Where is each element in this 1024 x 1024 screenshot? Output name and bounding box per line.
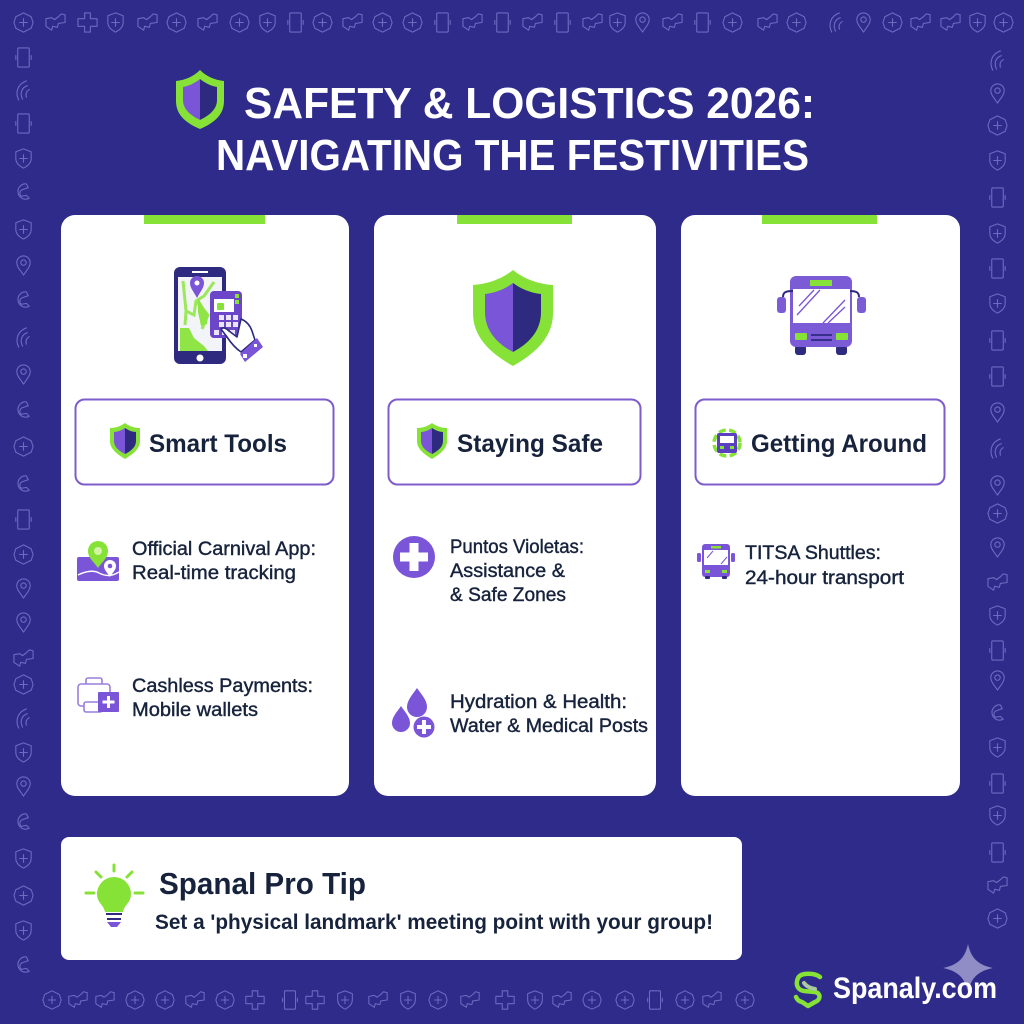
icon: s shield <box>796 974 820 1006</box>
icon: water drops <box>392 688 434 738</box>
label box <box>388 400 640 484</box>
panel: getting around <box>681 215 960 796</box>
icon: small shield <box>110 423 140 459</box>
heading: Getting Around <box>751 430 927 458</box>
text: cashless payments <box>132 676 313 721</box>
icon: phone with payment terminal <box>174 267 263 364</box>
text: official carnival app: Real-time tracking <box>132 563 296 584</box>
heading: Spanal Pro Tip <box>159 866 366 901</box>
text: hydration and health: Hydration & Health: <box>450 692 627 713</box>
text: hydration and health <box>450 692 648 737</box>
wordmark: Spanaly.com <box>833 972 997 1005</box>
panel: staying safe <box>374 215 656 796</box>
icon: small shield <box>417 423 447 459</box>
decorative icon border: right column <box>988 51 1007 928</box>
icon: small bus <box>697 544 735 579</box>
icon: map with pins <box>77 541 119 581</box>
label box <box>696 400 944 484</box>
text: puntos violetas: Puntos Violetas: <box>450 537 584 558</box>
icon: medical cross circle <box>393 536 435 578</box>
icon: title shield <box>176 70 224 129</box>
heading: Smart Tools <box>149 430 287 458</box>
icon: large shield <box>473 270 553 366</box>
text: titsa shuttles: 24-hour transport <box>745 568 905 589</box>
text: cashless payments: Cashless Payments: <box>132 676 313 697</box>
text: puntos violetas: & Safe Zones <box>450 585 566 606</box>
icon: large bus <box>777 276 866 355</box>
text: titsa shuttles: TITSA Shuttles: <box>745 543 881 564</box>
text: titsa shuttles <box>745 543 905 589</box>
panel: pro tip <box>61 837 742 960</box>
text: tip: Set a 'physical landmark' meeting point with your group! <box>155 911 713 934</box>
icon: wallet cards <box>78 678 119 712</box>
title <box>176 70 815 180</box>
title line 1: SAFETY & LOGISTICS 2026: <box>244 79 815 128</box>
icon: small bus in green ring <box>714 430 740 456</box>
text: official carnival app: Official Carnival App: <box>132 539 316 560</box>
title line 2: NAVIGATING THE FESTIVITIES <box>216 131 809 180</box>
text: hydration and health: Water & Medical Posts <box>450 716 648 737</box>
text: puntos violetas <box>450 537 584 606</box>
text: official carnival app <box>132 539 316 584</box>
decorative icon border: top row <box>14 13 1013 32</box>
panel: smart tools <box>61 215 349 796</box>
icon: light bulb <box>86 865 143 927</box>
heading: Staying Safe <box>457 430 603 458</box>
text: puntos violetas: Assistance & <box>450 561 565 582</box>
label box <box>76 400 334 484</box>
sparkle <box>943 944 993 992</box>
decorative icon border: bottom row <box>43 991 754 1009</box>
decorative icon border: left column <box>14 48 33 972</box>
text: cashless payments: Mobile wallets <box>132 700 258 721</box>
logo: spanaly.com <box>796 944 997 1006</box>
